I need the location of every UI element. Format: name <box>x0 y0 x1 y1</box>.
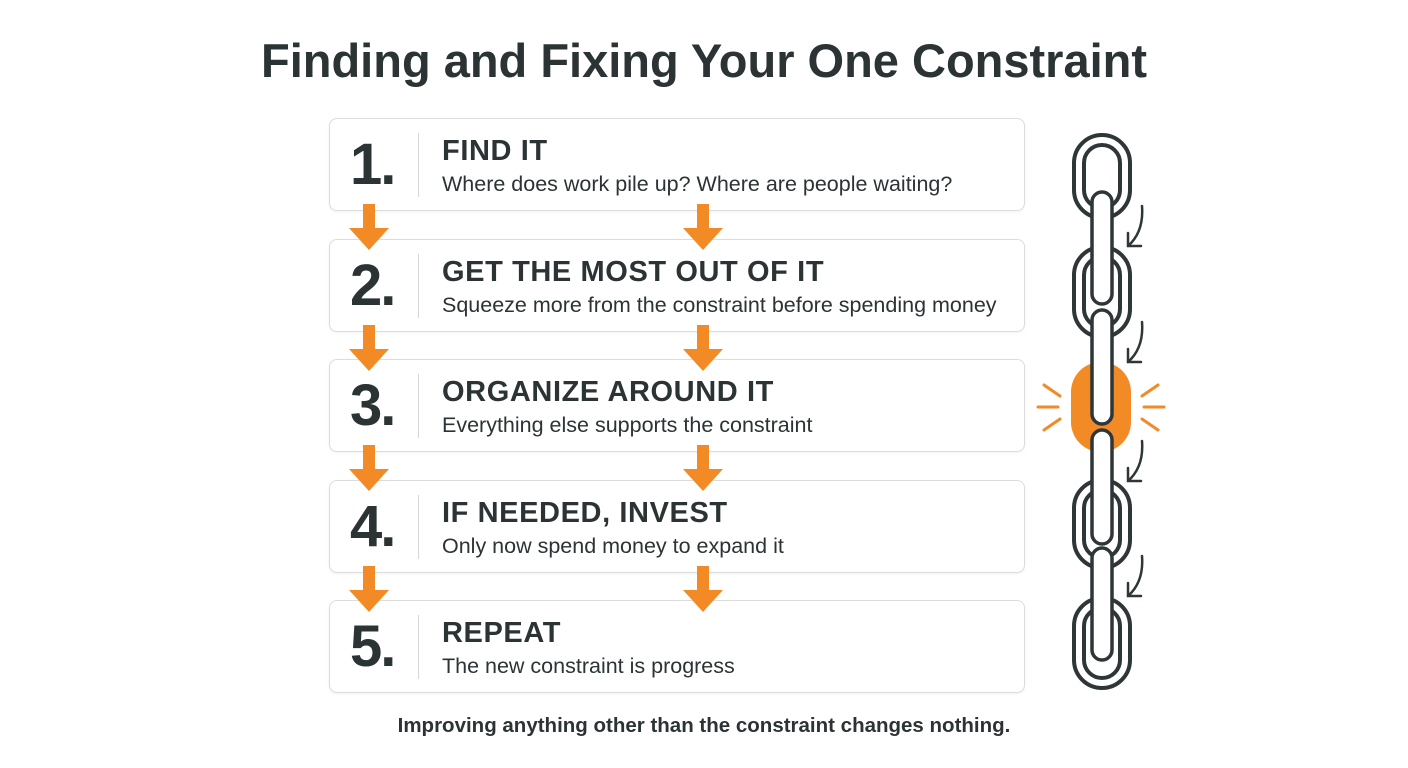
card 2: 2. <box>350 253 394 318</box>
card 3: Everything else supports the constraint <box>442 413 812 437</box>
card 3 <box>329 359 1025 452</box>
wide links <box>1079 140 1125 683</box>
card 1: Where does work pile up? Where are people waiting? <box>442 172 952 196</box>
card 3: 3. <box>350 373 394 438</box>
title: Finding and Fixing Your One Constraint <box>261 34 1147 87</box>
card 5: REPEAT <box>442 617 561 649</box>
rays <box>1038 385 1164 430</box>
card 1: FIND IT <box>442 135 548 167</box>
curved arrows <box>1128 206 1142 596</box>
card 5: 5. <box>350 614 394 679</box>
card 2: Squeeze more from the constraint before spending money <box>442 293 997 317</box>
card 4 <box>329 480 1025 573</box>
card 2 <box>329 239 1025 332</box>
card 5 <box>329 600 1025 693</box>
card 2: GET THE MOST OUT OF IT <box>442 256 824 288</box>
card 4: Only now spend money to expand it <box>442 534 784 558</box>
card 4: 4. <box>350 494 394 559</box>
footer statement: Improving anything other than the constraint changes nothing. <box>398 714 1010 737</box>
card 3: ORGANIZE AROUND IT <box>442 376 774 408</box>
card 1: 1. <box>350 132 394 197</box>
card 5: The new constraint is progress <box>442 654 735 678</box>
card 4: IF NEEDED, INVEST <box>442 497 728 529</box>
narrow links <box>1092 192 1112 660</box>
icon: chain with weak orange link <box>1036 133 1166 690</box>
card 1 <box>329 118 1025 211</box>
